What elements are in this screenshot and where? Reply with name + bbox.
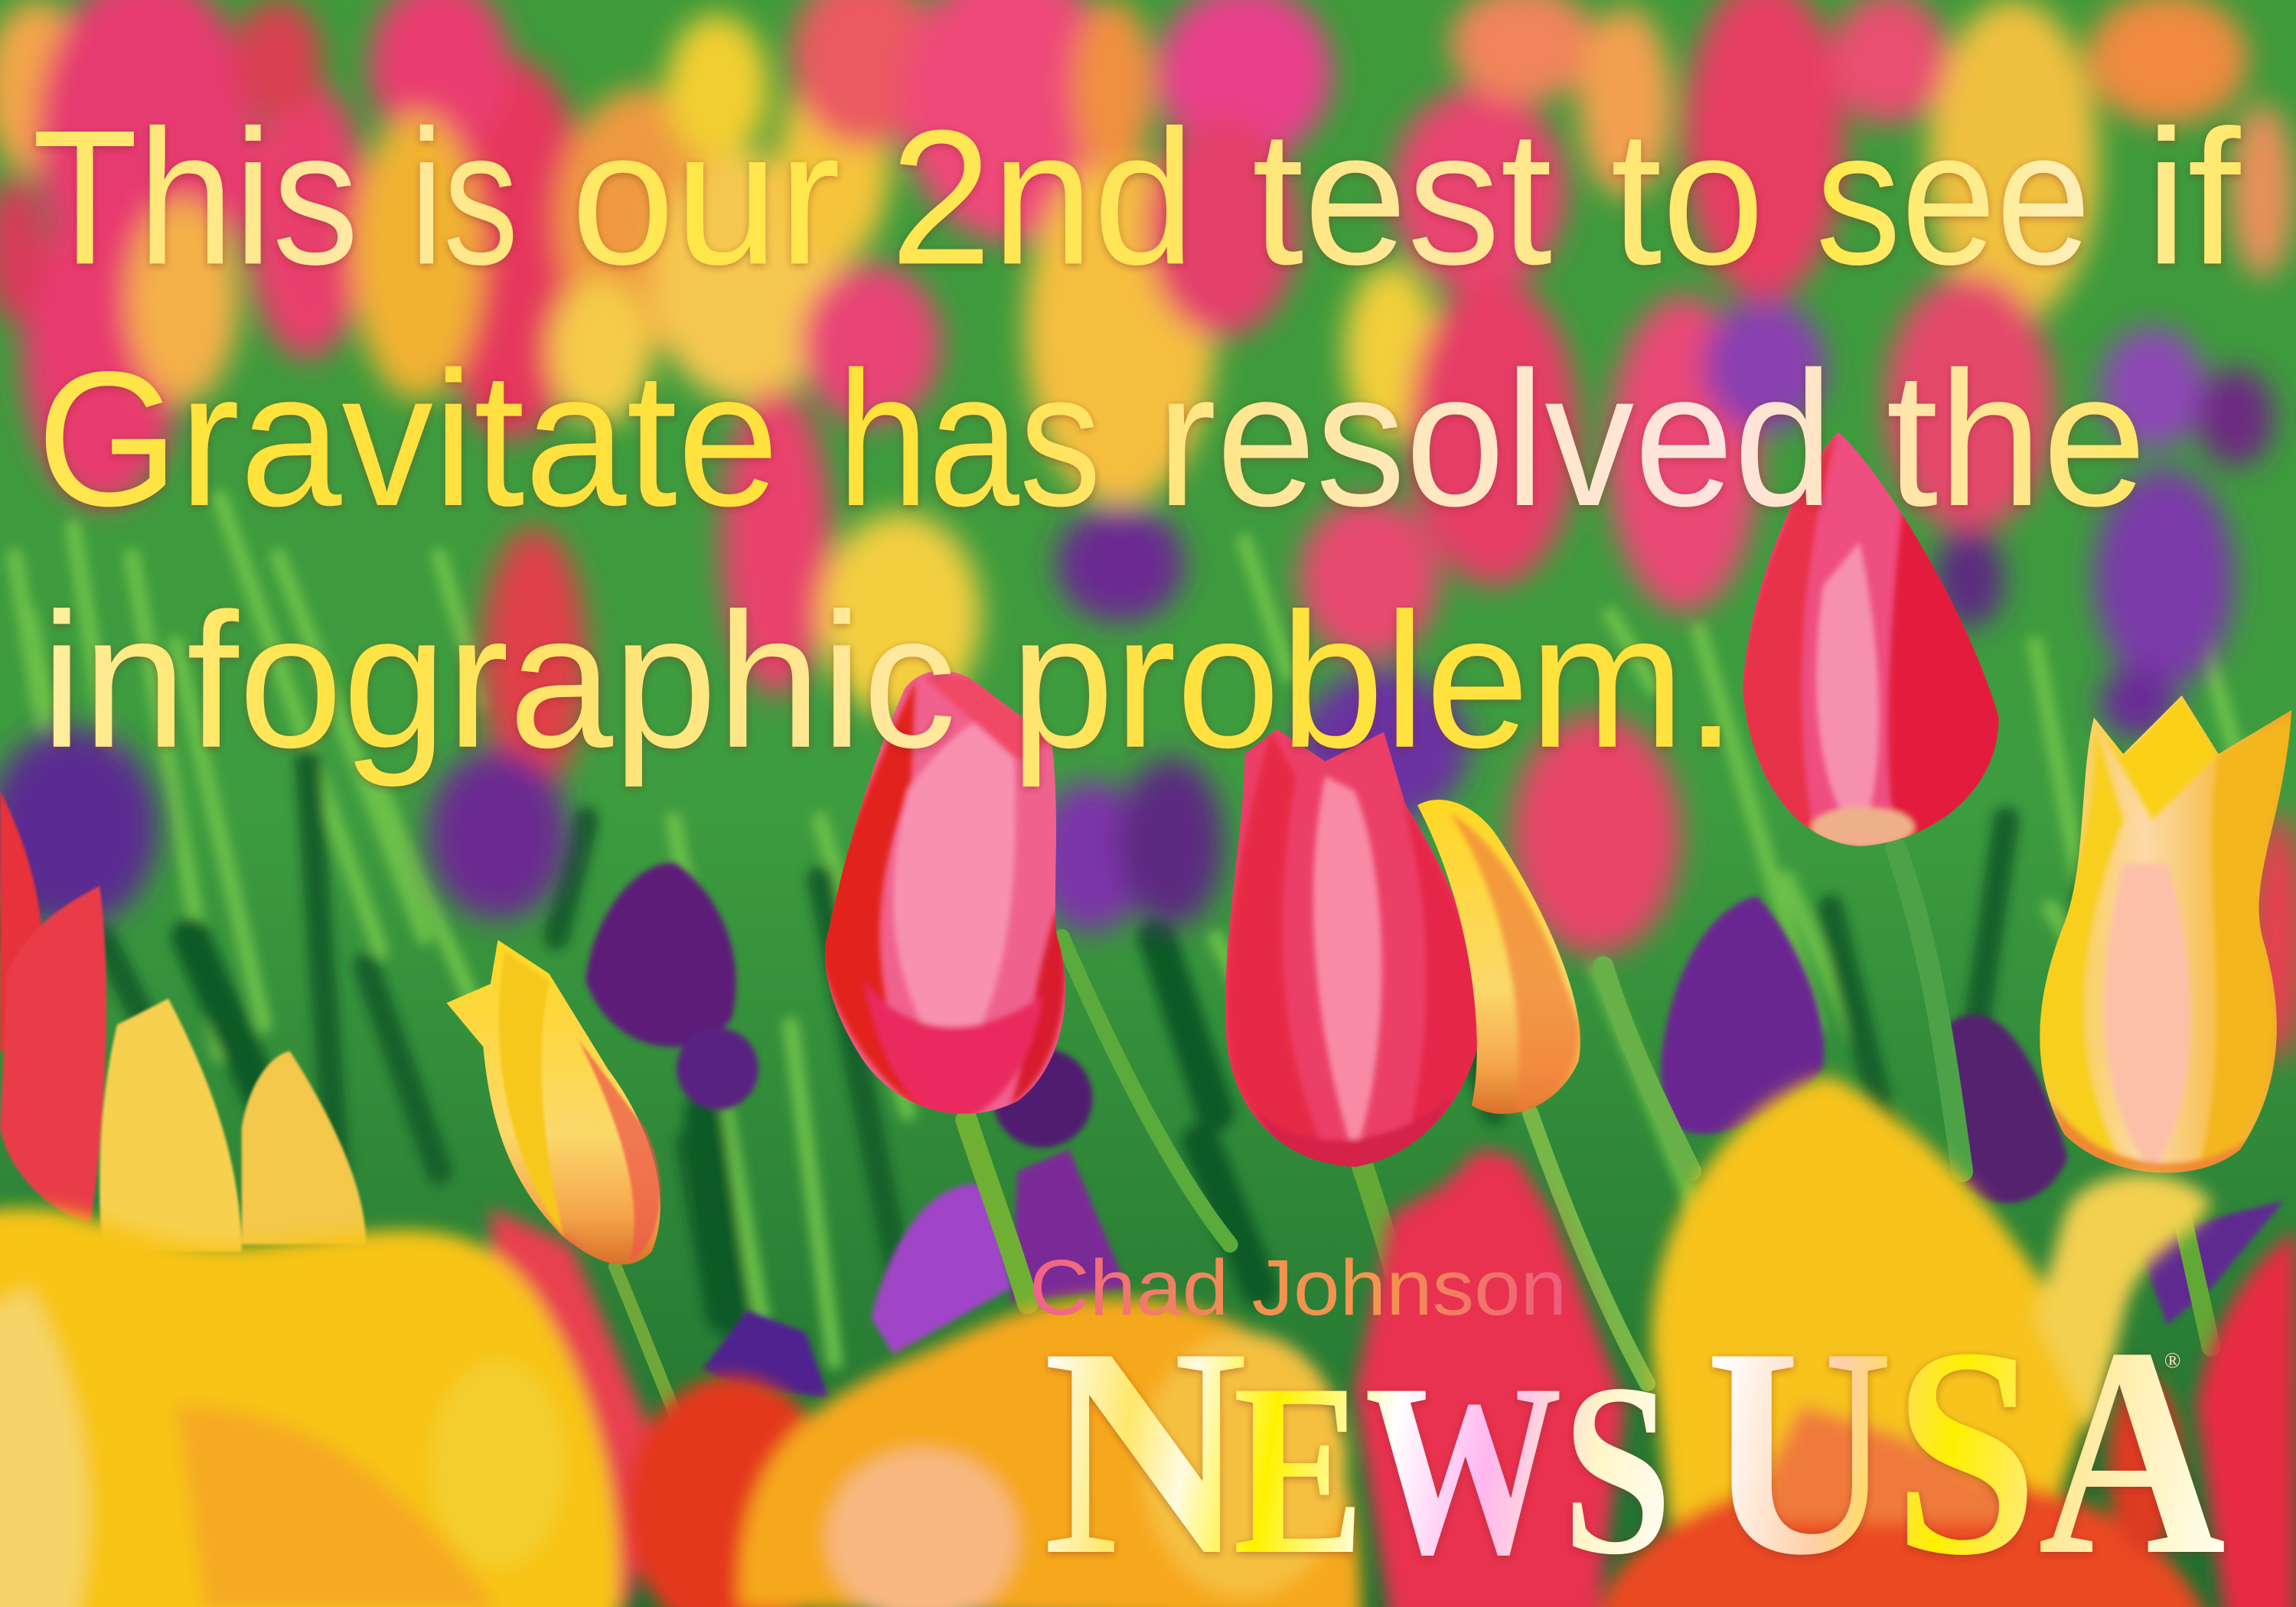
tulip stems — [615, 849, 2211, 1427]
heading line 3: infographic — [41, 574, 956, 788]
heading line 3 — [41, 574, 1737, 788]
heading line 1: This — [32, 90, 359, 305]
tulip group: lower-left yellow and red — [0, 790, 366, 1252]
heading line 1: test — [1252, 90, 1552, 305]
logo: News USA: ® — [2164, 1348, 2181, 1373]
heading line 3: problem. — [1010, 574, 1737, 788]
heading line 1: our — [571, 90, 840, 305]
byline: Chad Johnson: Chad Johnson — [1029, 1243, 1567, 1332]
background: blurred tulip field — [0, 0, 2296, 1061]
heading line 1: to — [1611, 90, 1764, 305]
foreground: blurred tulips — [0, 1076, 2296, 1607]
heading line 1: see — [1815, 90, 2091, 305]
tulip group: mid-ground purple tulips — [585, 863, 2285, 1398]
heading line 1 — [32, 90, 2241, 305]
tulip: small yellow left — [447, 940, 660, 1265]
tulip: pink upper right — [1735, 425, 2006, 856]
heading line 2 — [37, 332, 2147, 546]
tulip: pink centre left — [825, 671, 1065, 1114]
heading line 2: the — [1886, 332, 2147, 546]
logo: News USA — [1042, 1286, 2226, 1607]
heading line 2: Gravitate — [37, 332, 779, 546]
tulip: yellow-orange centre — [1417, 800, 1580, 1114]
heading: main title — [32, 90, 2241, 788]
tulip: yellow right — [2040, 695, 2291, 1172]
heading line 2: resolved — [1156, 332, 1833, 546]
heading line 1: if — [2145, 90, 2241, 305]
heading line 2: has — [837, 332, 1101, 546]
tulip: pink centre — [1225, 729, 1477, 1167]
heading line 1: is — [410, 90, 518, 305]
heading line 1: 2nd — [890, 90, 1195, 305]
logo: News USA: EWS — [1233, 1333, 1672, 1605]
